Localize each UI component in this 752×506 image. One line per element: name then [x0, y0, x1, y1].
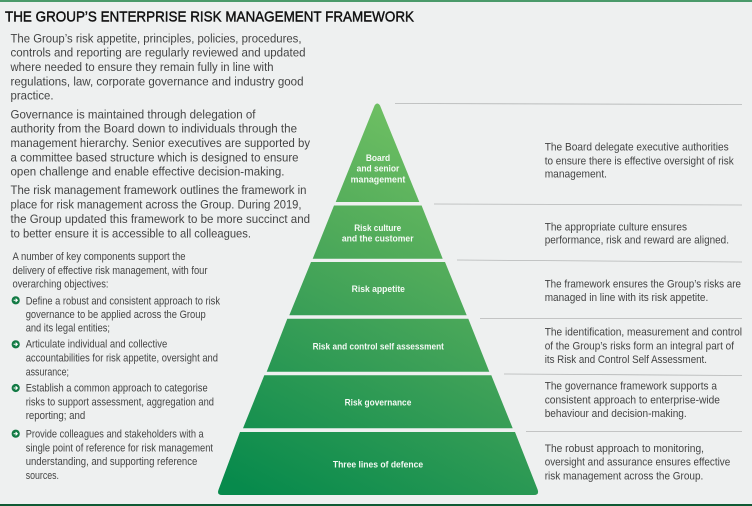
description: board [545, 142, 734, 181]
text block: intro paragraphs: authority from the Board down to individuals through the [10, 122, 297, 136]
description: appetite [545, 278, 741, 304]
objective 3 [12, 383, 214, 422]
tier: three lines of defence [218, 432, 538, 495]
text block: intro paragraphs: The Group’s risk appetite, principles, policies, procedures, [10, 31, 302, 45]
icon: arrow bullet [12, 384, 20, 392]
icon: arrow bullet [12, 340, 20, 348]
tier: risk and control self assessment [267, 319, 489, 372]
text block: intro paragraphs: practice. [10, 89, 54, 103]
objective 3: risks to support assessment, aggregation and [26, 396, 214, 408]
text block: intro paragraphs: management hierarchy. Senior executives are supported by [10, 136, 311, 150]
tier: risk culture and the customer: and the customer [342, 234, 414, 245]
tier: risk appetite [289, 262, 467, 315]
objective 3: reporting; and [26, 410, 85, 422]
objective 2 [12, 339, 218, 379]
objective 1: and its legal entities; [26, 323, 110, 335]
tier: risk governance [243, 375, 513, 428]
description: governance: behaviour and decision-making. [545, 408, 687, 420]
description: board: The Board delegate executive authorities [545, 142, 729, 154]
description: culture [545, 221, 729, 247]
description: three lines: oversight and assurance ensures effective [545, 457, 730, 469]
objective 1: governance to be applied across the Group [26, 309, 206, 321]
description: three lines: The robust approach to monitoring, [545, 443, 704, 455]
objective 2: assurance; [26, 367, 69, 379]
objective 4: single point of reference for risk management [26, 442, 214, 454]
text block: intro paragraphs [10, 31, 311, 240]
description: governance: The governance framework supports a [545, 381, 718, 393]
text block: intro paragraphs: regulations, law, corporate governance and industry good [10, 74, 304, 88]
text block: intro paragraphs: a committee based structure which is designed to ensure [10, 150, 299, 164]
text block: key components intro: A number of key components support the [12, 251, 186, 263]
description: three lines: risk management across the Group. [545, 470, 703, 482]
description: three lines [545, 443, 730, 482]
text block: key components intro: overarching objectives: [12, 279, 108, 291]
text block: intro paragraphs: to better ensure it is accessible to all colleagues. [10, 226, 251, 240]
objective 1: Define a robust and consistent approach to risk [26, 295, 220, 307]
objective 3: Establish a common approach to categorise [26, 383, 208, 395]
description: self assessment: of the Group’s risks form an integral part of [545, 340, 735, 352]
description: governance [545, 381, 720, 420]
title: THE GROUP’S ENTERPRISE RISK MANAGEMENT FRAMEWORK [5, 9, 414, 26]
text block: intro paragraphs: the Group updated this framework to be more succinct and [10, 212, 310, 226]
text block: intro paragraphs: controls and reporting are regularly reviewed and updated [10, 46, 306, 60]
description: self assessment [545, 327, 742, 366]
text block: key components intro [12, 251, 208, 291]
text block: intro paragraphs: place for risk management across the Group. During 2019, [10, 198, 302, 212]
description: board: management. [545, 169, 607, 181]
tier: risk appetite: Risk appetite [352, 284, 405, 295]
objective 4: sources. [26, 470, 59, 482]
description: governance: consistent approach to enterprise-wide [545, 394, 720, 406]
objective 2: accountabilities for risk appetite, oversight and [26, 353, 218, 365]
tier: board and senior management: management [351, 174, 406, 185]
objective 2: Articulate individual and collective [26, 339, 167, 351]
tier: risk culture and the customer: Risk culture [354, 223, 401, 234]
tier: risk culture and the customer [313, 206, 443, 259]
icon: arrow bullet [12, 296, 20, 304]
objective 4: Provide colleagues and stakeholders with a [26, 429, 204, 441]
description: culture: performance, risk and reward are aligned. [545, 235, 729, 247]
tier: risk and control self assessment: Risk and control self assessment [313, 342, 445, 353]
description: board: to ensure there is effective oversight of risk [545, 155, 734, 167]
objective 4: understanding, and supporting reference [26, 456, 197, 468]
description: appetite: managed in line with its risk appetite. [545, 292, 708, 304]
tier: board and senior management: and senior [357, 164, 400, 175]
tier: board and senior management: Board [366, 153, 390, 164]
tier: risk governance: Risk governance [345, 398, 411, 409]
text block: intro paragraphs: The risk management framework outlines the framework in [10, 183, 307, 197]
text block: intro paragraphs: where needed to ensure they remain fully in line with [10, 60, 274, 74]
description: culture: The appropriate culture ensures [545, 221, 687, 233]
text block: key components intro: delivery of effective risk management, with four [12, 265, 208, 277]
text block: intro paragraphs: open challenge and enable effective decision-making. [10, 165, 284, 179]
icon: arrow bullet [12, 430, 20, 438]
text block: intro paragraphs: Governance is maintained through delegation of [10, 107, 256, 121]
objective 4 [12, 429, 214, 482]
pyramid diagram [218, 104, 538, 495]
tier: board and senior management [336, 104, 419, 202]
tier: three lines of defence: Three lines of defence [333, 460, 423, 471]
description: self assessment: its Risk and Control Self Assessment. [545, 354, 707, 366]
objective 1 [12, 295, 220, 335]
